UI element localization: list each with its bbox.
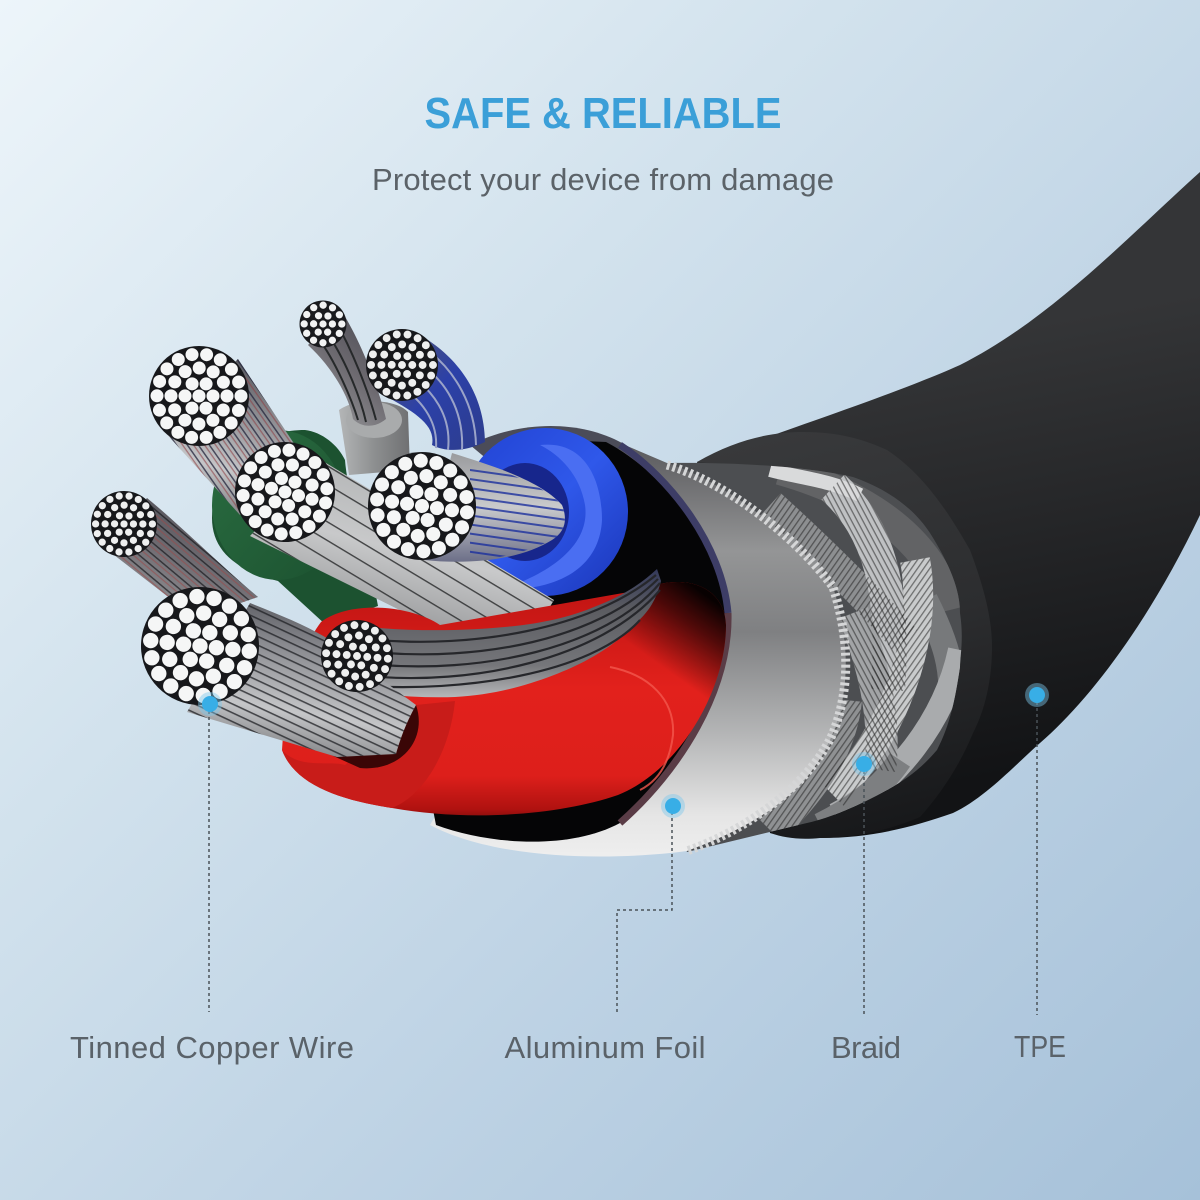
blue ring inner wall <box>500 445 602 590</box>
callout: TPE <box>1014 683 1066 1064</box>
lower left bundle texture <box>187 603 416 757</box>
wires: center bundle <box>250 460 554 640</box>
wires: blue-tinted top bundle <box>380 340 485 450</box>
foil serrated edge <box>667 465 846 851</box>
callout: tinned copper wire <box>70 692 354 1065</box>
cavity <box>400 440 728 842</box>
braid <box>640 463 962 852</box>
small top bundle strands <box>318 320 376 422</box>
strand end: far left <box>91 491 157 557</box>
blue ring rim cap <box>470 426 622 480</box>
aluminum foil <box>430 443 846 857</box>
red tube sleeve <box>282 701 455 808</box>
upper left bundle texture <box>163 359 295 515</box>
cavity rim lower <box>620 613 728 823</box>
cable illustration <box>91 172 1200 857</box>
right bundle texture <box>470 462 565 560</box>
gray tube <box>339 401 410 475</box>
wires: small top bundle <box>308 310 386 426</box>
gray tube opening <box>346 402 402 438</box>
strand end: center <box>224 431 346 553</box>
red tube body <box>282 582 726 815</box>
wires: twisted gray band <box>365 569 661 697</box>
callout: aluminum foil: Aluminum Foil <box>504 1030 706 1065</box>
callout: TPE: TPE <box>1014 1029 1066 1064</box>
callout: aluminum foil <box>504 794 706 1065</box>
subtitle: Protect your device from damage <box>372 162 834 197</box>
strand end: lower left <box>135 581 265 711</box>
far left bundle texture <box>105 498 258 612</box>
blue ring <box>462 428 628 596</box>
TPE jacket <box>697 172 1200 838</box>
callout: braid: Braid <box>831 1030 901 1065</box>
blue ring hole <box>481 463 569 561</box>
braid weave bands <box>770 470 960 830</box>
blue bundle strands <box>398 352 476 450</box>
green tube end <box>212 430 344 580</box>
gray band strands <box>366 575 660 687</box>
wires: lower left bundle <box>187 603 416 757</box>
wires: upper left bundle <box>163 359 295 515</box>
strand end: top blue <box>366 329 438 401</box>
strand end: lower center <box>318 617 396 695</box>
strand end: upper left <box>149 346 249 446</box>
red tube fade into cavity <box>600 582 726 795</box>
wires: right bundle <box>424 453 565 562</box>
red tube opening <box>320 705 419 768</box>
jacket end collar <box>697 432 992 839</box>
title: SAFE & RELIABLE <box>424 89 782 138</box>
strand end: right <box>361 445 483 567</box>
red tube highlight <box>610 667 673 790</box>
callout: braid <box>831 752 901 1065</box>
braid base <box>640 463 962 852</box>
cavity rim upper <box>620 445 728 613</box>
wires: far left bundle <box>105 498 258 612</box>
green tube <box>212 430 378 625</box>
strand end: top small <box>300 300 346 348</box>
callout: tinned copper wire: Tinned Copper Wire <box>70 1030 354 1065</box>
center bundle texture <box>250 460 554 640</box>
